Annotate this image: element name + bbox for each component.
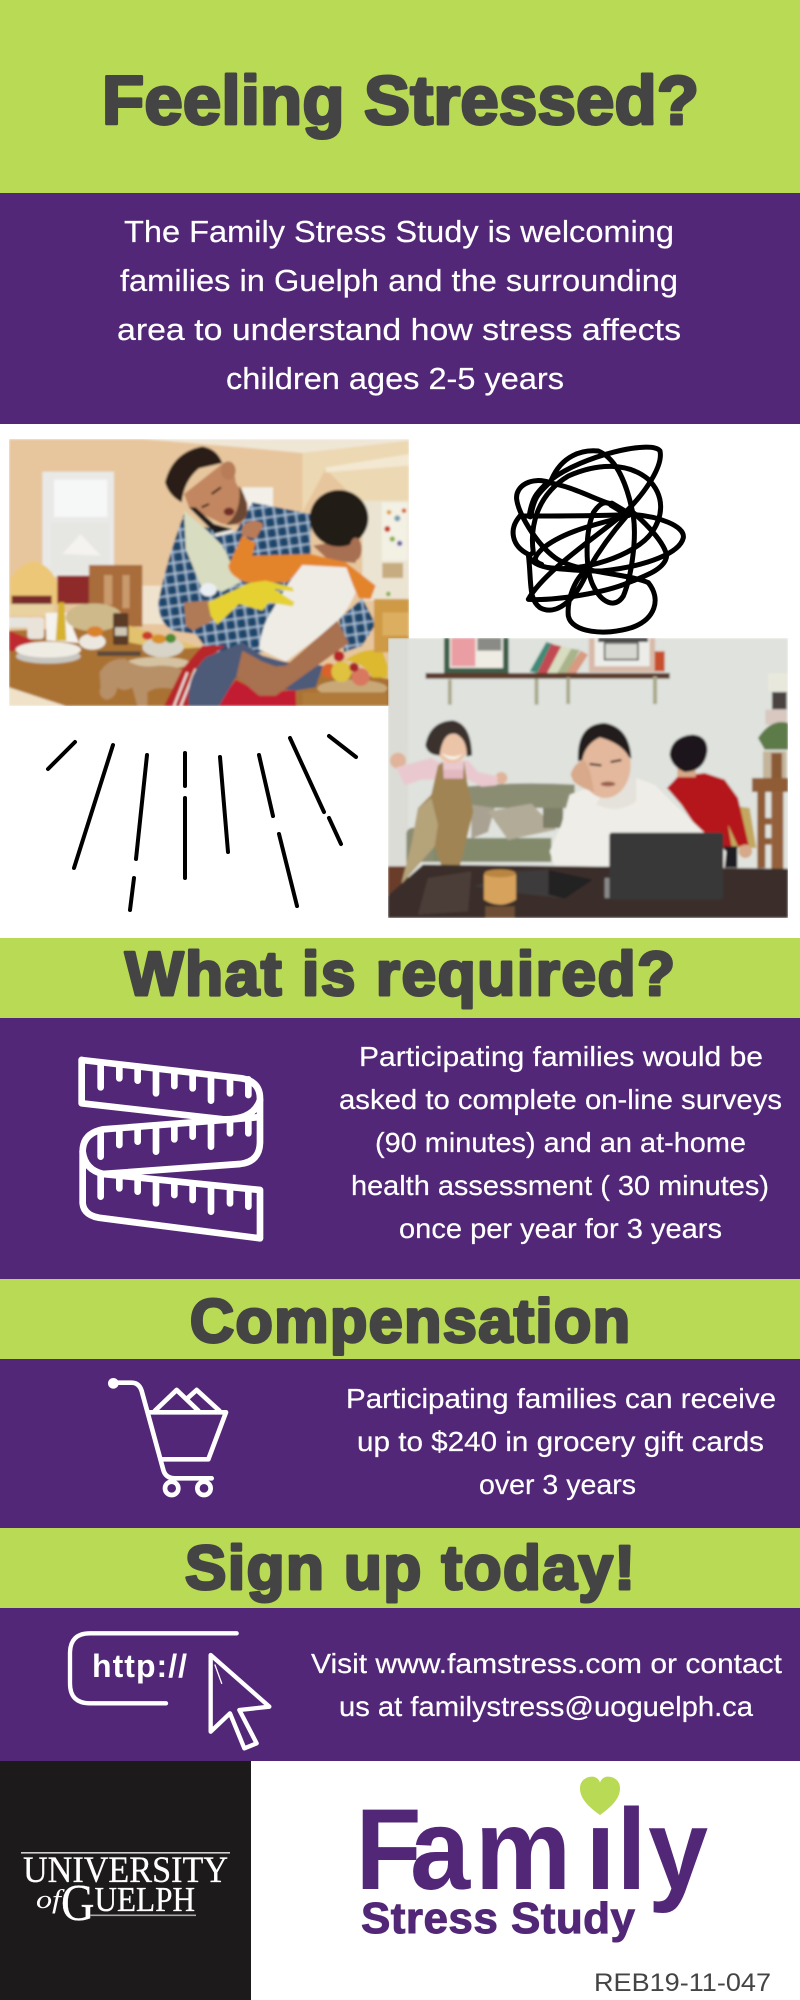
panel: what is required	[0, 1018, 800, 1279]
icon: measuring tape	[82, 1060, 260, 1238]
heading: compensation: Compensation	[190, 1287, 630, 1355]
logo: University of Guelph	[0, 1761, 251, 2000]
panel: what is required: (90 minutes) and an at-home	[375, 1127, 746, 1158]
panel: what is required: asked to complete on-line surveys	[339, 1084, 782, 1115]
panel: compensation: Participating families can receive	[346, 1383, 776, 1414]
heading: sign up today: Sign up today!	[185, 1534, 635, 1603]
logo: University of Guelph: G	[61, 1875, 94, 1932]
heading: what is required	[0, 938, 800, 1018]
panel: study introduction: children ages 2-5 years	[226, 361, 564, 396]
icon: green heart	[580, 1777, 620, 1815]
panel: study introduction	[0, 193, 800, 424]
panel: what is required: Participating families would be	[359, 1041, 763, 1072]
icon: black scribble	[513, 447, 683, 632]
approval code: REB19-11-047	[594, 1969, 771, 1997]
title banner	[0, 0, 800, 193]
heading: what is required: What is required?	[125, 940, 675, 1009]
panel: compensation: up to $240 in grocery gift cards	[357, 1426, 764, 1457]
icon: burst of radiating lines	[48, 736, 356, 910]
icon: web address with cursor	[70, 1633, 269, 1748]
panel: sign up today: Visit www.famstress.com or contact	[311, 1648, 782, 1679]
panel: study introduction: area to understand how stress affects	[117, 312, 681, 347]
panel: what is required: health assessment ( 30 minutes)	[351, 1170, 769, 1201]
logo: University of Guelph: UNIVERSITY	[23, 1850, 228, 1891]
panel: compensation	[0, 1359, 800, 1528]
panel: study introduction: families in Guelph and the surrounding	[120, 263, 678, 298]
photo: mother working at a laptop with children running	[388, 638, 788, 918]
icon: shopping cart	[110, 1380, 226, 1495]
logo: Family Stress Study: Family	[356, 1785, 708, 1914]
panel: compensation: over 3 years	[479, 1469, 636, 1500]
title banner: Feeling Stressed?	[102, 62, 699, 139]
heading: sign up today	[0, 1528, 800, 1608]
panel: what is required: once per year for 3 years	[399, 1213, 722, 1244]
panel: study introduction: The Family Stress Study is welcoming	[124, 214, 674, 249]
logo: Family Stress Study: Stress Study	[361, 1894, 636, 1943]
heading: compensation	[0, 1279, 800, 1359]
logo: University of Guelph: UELPH	[94, 1880, 195, 1919]
logo: University of Guelph: of	[36, 1885, 66, 1914]
panel: sign up today: us at familystress@uoguelph.ca	[339, 1691, 754, 1722]
panel: sign up today	[0, 1608, 800, 1761]
icon: web address with cursor: http://	[92, 1648, 187, 1684]
photo: father holding child while on the phone	[9, 439, 409, 706]
